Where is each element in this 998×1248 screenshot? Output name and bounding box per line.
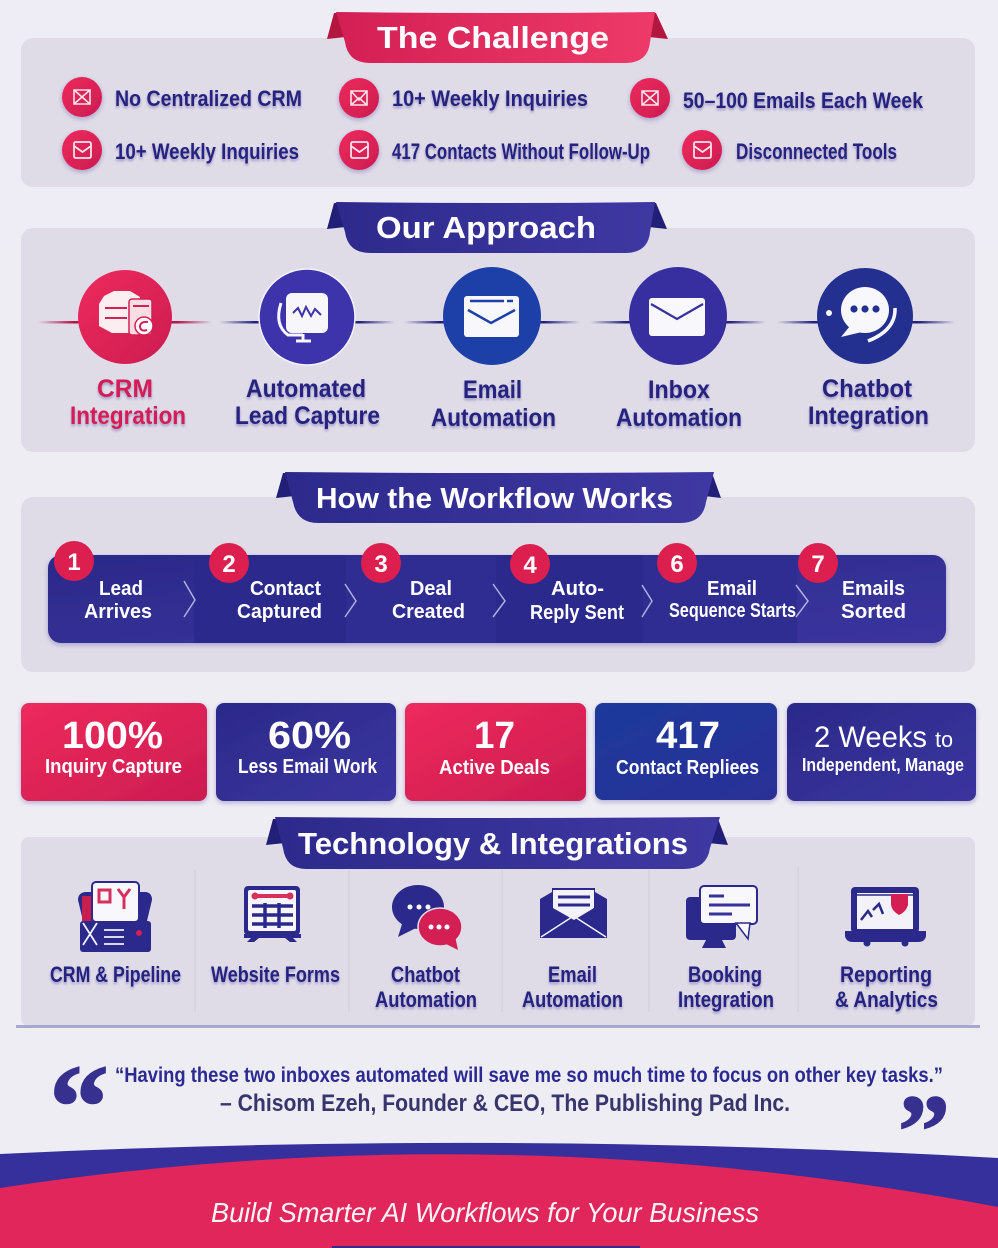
step: Chatbot Integration [777, 268, 955, 430]
item: Disconnected Tools [682, 130, 897, 170]
item: 417 Contacts Without Follow-Up [339, 130, 650, 170]
panel: the challenge [21, 12, 975, 187]
step 3: 3 [374, 551, 388, 578]
step 6: 6 [670, 551, 684, 578]
panel: technology and integrations [16, 817, 980, 1028]
step 4 [510, 544, 652, 624]
heading: Technology and Integrations: Technology & Integrations [298, 826, 688, 861]
item: 10+ Weekly Inquiries second: 10+ Weekly Inquiries [115, 139, 299, 164]
step: Inbox Automation [590, 267, 766, 432]
item: Chatbot Automation: Automation [375, 987, 477, 1012]
panel: our approach [21, 202, 975, 452]
stat card: 17 Active Deals [405, 703, 586, 801]
step 7: Sorted [841, 601, 906, 623]
step: CRM Integration: Integration [70, 402, 186, 430]
icon: web form [244, 886, 301, 942]
step 6 [657, 543, 808, 622]
item: 417 Contacts Without Follow-Up: 417 Contacts Without Follow-Up [392, 139, 650, 164]
heading: The Challenge [327, 12, 668, 63]
item: 10+ Weekly Inquiries second [62, 130, 299, 170]
item: Reporting and Analytics: & Analytics [835, 987, 938, 1012]
item: Reporting and Analytics [835, 887, 938, 1012]
step: Automated Lead Capture: Lead Capture [235, 402, 380, 430]
step 2 [209, 543, 356, 623]
icon: envelope [649, 298, 705, 336]
icon: booking monitor [686, 886, 757, 948]
step: Automated Lead Capture: Automated [246, 375, 366, 403]
item: 10+ Weekly Inquiries: 10+ Weekly Inquiries [392, 86, 588, 111]
heading: Technology and Integrations [266, 817, 728, 869]
icon: closing quote mark: ” [898, 1074, 950, 1189]
workflow bar [48, 541, 946, 643]
heading: How the Workflow Works [276, 472, 721, 523]
step 6: Sequence Starts [669, 600, 796, 622]
button edge [332, 1246, 640, 1248]
step 2: Captured [237, 601, 322, 623]
stat card: 417 Contact Replies: Contact Repliees [616, 757, 759, 779]
step 1: Lead [99, 578, 143, 600]
item: Chatbot Automation [375, 885, 477, 1012]
step: Chatbot Integration: Chatbot [822, 375, 913, 403]
heading: The Challenge: The Challenge [377, 20, 609, 55]
icon: email [464, 296, 519, 337]
step: Email Automation: Automation [431, 404, 556, 432]
stat card: 100% Inquiry Capture [21, 703, 207, 801]
stat card: 17 Active Deals: 17 [474, 715, 515, 757]
step 4: Reply Sent [530, 602, 624, 624]
step: Inbox Automation: Inbox [648, 376, 710, 404]
footer banner [0, 1143, 998, 1248]
stat card: 100% Inquiry Capture: 100% [62, 715, 163, 757]
item: Booking Integration: Booking [688, 962, 762, 987]
step: Chatbot Integration: Integration [808, 402, 929, 430]
item: Email Automation: Automation [522, 987, 623, 1012]
step 7: 7 [811, 551, 825, 578]
icon: laptop report [845, 887, 926, 946]
step 4: Auto- [551, 578, 604, 600]
stat card: 2 Weeks to Independent Manage [787, 703, 976, 801]
heading: Our Approach [327, 202, 667, 253]
stat card: 60% Less Email Work [216, 703, 396, 801]
step 3 [361, 543, 505, 623]
call to action text: Build Smarter AI Workflows for Your Business [211, 1197, 759, 1228]
panel: how the workflow works [21, 472, 975, 672]
item: 10+ Weekly Inquiries [339, 78, 588, 118]
stat card: 2 Weeks to Independent Manage: 2 Weeks to [814, 721, 953, 754]
step 1 [54, 541, 195, 623]
stat card: 2 Weeks to Independent Manage: Independent, Manage [802, 755, 964, 775]
step 6: Email [707, 578, 757, 600]
step: CRM Integration [38, 270, 212, 430]
icon: CRM folder [78, 882, 152, 952]
item: Disconnected Tools: Disconnected Tools [736, 139, 897, 164]
icon: chat bubbles [392, 885, 462, 950]
item: Email Automation: Email [548, 962, 597, 987]
step: CRM Integration: CRM [97, 375, 153, 403]
step 3: Deal [410, 578, 452, 600]
stat card: 100% Inquiry Capture: Inquiry Capture [45, 756, 182, 778]
item: Website Forms [211, 886, 340, 987]
step: Email Automation: Email [463, 376, 522, 404]
item: Reporting and Analytics: Reporting [840, 962, 932, 987]
icon: CRM stack [99, 291, 153, 335]
step 1: 1 [67, 549, 81, 576]
step 7: Emails [842, 578, 905, 600]
icon: opening quote mark: “ [49, 1040, 109, 1173]
item: CRM and Pipeline [50, 882, 181, 987]
stat card: 417 Contact Replies [595, 703, 777, 800]
step 2: 2 [222, 551, 236, 578]
stat card: 60% Less Email Work: Less Email Work [238, 756, 378, 778]
stat card: 17 Active Deals: Active Deals [439, 757, 550, 779]
step: Inbox Automation: Automation [616, 404, 742, 432]
item: Booking Integration [678, 886, 774, 1012]
testimonial quote [49, 1040, 950, 1189]
heading: How the Workflow Works: How the Workflow Works [316, 483, 673, 515]
item: No Centralized CRM: No Centralized CRM [115, 86, 302, 111]
item: 50-100 Emails Each Week [630, 78, 924, 118]
step 2: Contact [250, 578, 321, 600]
step 1: Arrives [84, 601, 152, 623]
icon: monitor with waveform [279, 293, 328, 341]
icon: chat bubble [826, 287, 895, 341]
item: 50-100 Emails Each Week: 50–100 Emails Each Week [683, 88, 924, 113]
heading: Our Approach: Our Approach [376, 210, 596, 245]
item: CRM and Pipeline: CRM & Pipeline [50, 962, 181, 987]
step 7 [798, 543, 906, 623]
stat card: 60% Less Email Work: 60% [268, 715, 351, 757]
step 4: 4 [523, 552, 537, 579]
step 3: Created [392, 601, 465, 623]
step: Email Automation [404, 267, 580, 432]
quote attribution: – Chisom Ezeh, Founder & CEO, The Publishing Pad Inc. [220, 1090, 790, 1117]
stat card: 417 Contact Replies: 417 [656, 715, 720, 757]
item: No Centralized CRM [62, 77, 302, 117]
item: Email Automation [522, 888, 623, 1012]
step: Automated Lead Capture [219, 269, 395, 430]
item: Website Forms: Website Forms [211, 962, 340, 987]
item: Chatbot Automation: Chatbot [391, 962, 461, 987]
icon: open envelope [540, 888, 607, 938]
item: Booking Integration: Integration [678, 987, 774, 1012]
